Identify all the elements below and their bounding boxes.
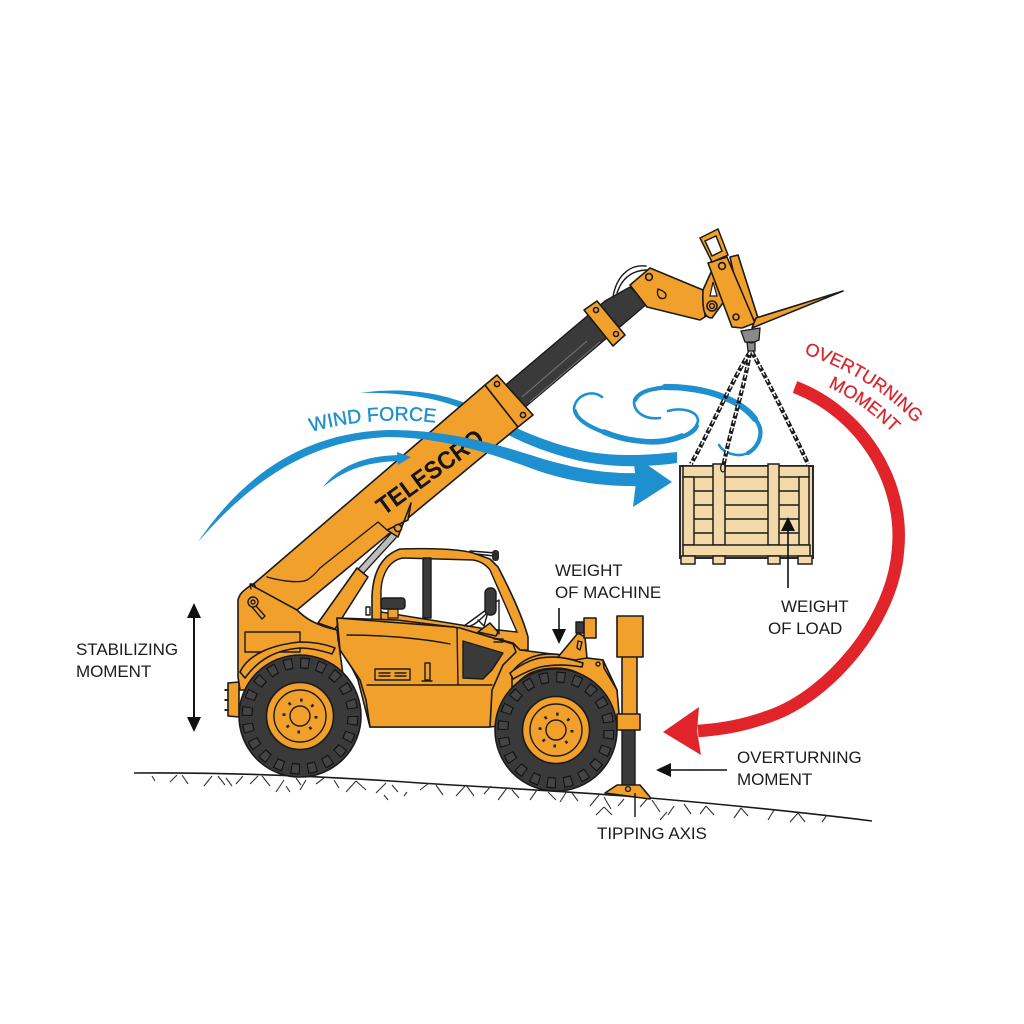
stabilizing moment label: STABILIZING <box>76 640 178 659</box>
stabilizing moment double arrow <box>187 603 201 732</box>
door lines <box>347 628 492 685</box>
rear wheel <box>239 655 361 777</box>
front body around wheel <box>512 654 620 725</box>
main body shell <box>337 618 617 727</box>
rear fender <box>240 642 335 678</box>
steering wheel and mirror <box>464 588 499 636</box>
front wheel <box>495 669 617 791</box>
wooden crate <box>680 464 813 564</box>
front fender <box>510 657 583 679</box>
overturning moment label: MOMENT <box>737 770 812 789</box>
overturning moment arrow <box>656 763 727 777</box>
telescopic boom <box>240 229 843 625</box>
crate feet <box>681 556 812 564</box>
rear pivot block <box>238 585 345 690</box>
outer orange boom <box>240 385 518 625</box>
door window panel <box>463 641 503 679</box>
tipping axis label: TIPPING AXIS <box>597 824 707 843</box>
ground slope with hatching <box>134 773 872 822</box>
top lifting eye <box>700 229 728 262</box>
stabilizer outrigger <box>605 616 650 799</box>
fork carriage <box>703 270 725 318</box>
wind stream: upper band passing behind the boom <box>360 390 677 466</box>
rear bumper <box>228 682 239 717</box>
machine body <box>226 549 620 727</box>
cab pillar <box>423 558 431 618</box>
fork tine <box>752 291 843 328</box>
roof beacon <box>470 550 499 561</box>
side tank <box>422 663 432 681</box>
weight of machine label: WEIGHT <box>555 561 623 580</box>
weight of load label: WEIGHT <box>781 597 849 616</box>
overturning moment label: OVERTURNING <box>737 748 862 767</box>
boom collar <box>485 375 533 427</box>
weight of load label: OF LOAD <box>768 619 842 638</box>
vent <box>375 669 410 680</box>
tipping axis leader <box>634 793 636 817</box>
cab window <box>381 558 517 632</box>
light bracket <box>558 633 587 660</box>
lift cylinder <box>318 503 411 629</box>
cab frame <box>372 549 528 650</box>
boom head <box>630 268 708 320</box>
wind swirl <box>574 387 760 455</box>
overturning moment red label: OVERTURNING <box>806 344 922 422</box>
wind force main stream over boom <box>198 430 672 542</box>
weight of machine arrow <box>552 608 566 644</box>
wind force label: WIND FORCE <box>308 406 436 432</box>
hook swivel <box>741 328 760 351</box>
weight of load arrow <box>781 517 795 588</box>
hydraulic hoses <box>613 266 648 297</box>
overturning moment red arc arrow <box>663 387 899 755</box>
lifting chains <box>691 352 808 468</box>
inner black boom section <box>495 287 648 414</box>
upper collar <box>584 301 625 346</box>
operator seat <box>366 598 405 618</box>
overturning moment red label: MOMENT <box>829 376 902 430</box>
small wind arrow <box>323 452 411 487</box>
boom brand lettering: TELESCRO <box>371 424 489 521</box>
stabilizing moment label: MOMENT <box>76 662 151 681</box>
weight of machine label: OF MACHINE <box>555 583 661 602</box>
